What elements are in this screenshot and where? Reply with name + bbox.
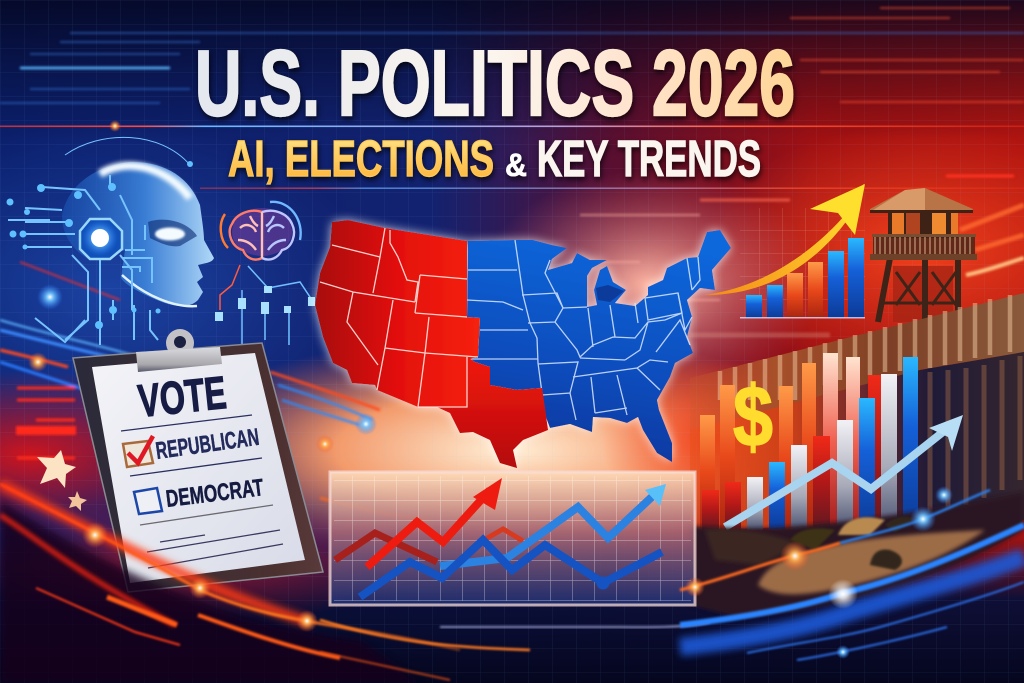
subtitle: KEY TRENDS (537, 130, 761, 187)
red states (315, 220, 548, 468)
red state borders (320, 228, 478, 407)
red swooshes (0, 484, 530, 680)
main blue line (360, 540, 662, 597)
democrat option (134, 474, 265, 514)
bars (740, 238, 865, 318)
democrat option: DEMOCRAT (164, 474, 265, 513)
border wall (690, 293, 1024, 530)
head silhouette (62, 162, 214, 306)
small growth chart: yellow arrow over bars (704, 184, 865, 318)
republican option (123, 424, 261, 467)
cabin (888, 210, 958, 238)
desert ground with shrubs (690, 492, 1024, 618)
background light streaks (0, 8, 1024, 520)
paper (92, 353, 305, 583)
faded red line (335, 533, 437, 562)
chart panel (330, 472, 695, 605)
sand (758, 530, 985, 594)
election line chart panel (330, 472, 695, 605)
trend arrow (725, 415, 963, 527)
circuit nodes (6, 161, 193, 329)
glowing chip (80, 219, 122, 259)
roof (870, 188, 973, 212)
metal clip (136, 329, 222, 372)
vote heading: VOTE (136, 366, 229, 427)
front row bars (702, 398, 875, 530)
subtitle: AI, ELECTIONS (228, 130, 494, 187)
balcony (870, 234, 977, 260)
stars (37, 450, 87, 511)
back row bars (700, 353, 918, 530)
board (73, 343, 323, 592)
illustration: neural brain (215, 202, 315, 345)
circuit traces (8, 137, 190, 345)
title block (0, 31, 1024, 189)
paper rules (121, 415, 283, 568)
yellow arrow (704, 184, 864, 295)
lower wall (690, 352, 1024, 530)
light blue arrow line (440, 484, 666, 566)
data squares (215, 286, 315, 321)
illustration: AI head with circuits (6, 137, 214, 345)
subtitle (228, 130, 761, 187)
upper wall (690, 293, 1024, 430)
blue swooshes (680, 490, 1024, 660)
red arrow line (367, 478, 502, 567)
eye (148, 220, 197, 246)
US election map (315, 220, 731, 468)
republican option: REPUBLICAN (154, 424, 261, 465)
lower-left dark shadow under swoosh (0, 500, 420, 683)
watchtower (870, 188, 977, 325)
blue states (467, 230, 731, 462)
dollar sign icon: $ (733, 369, 773, 465)
tower legs (893, 266, 953, 322)
chart grid (740, 208, 865, 318)
rule lines (0, 126, 1024, 189)
dark ground base (690, 492, 1024, 618)
blue state borders (467, 240, 700, 420)
subtitle: & (505, 147, 527, 183)
campaign finance bar chart (700, 353, 963, 530)
vote clipboard (73, 329, 323, 592)
